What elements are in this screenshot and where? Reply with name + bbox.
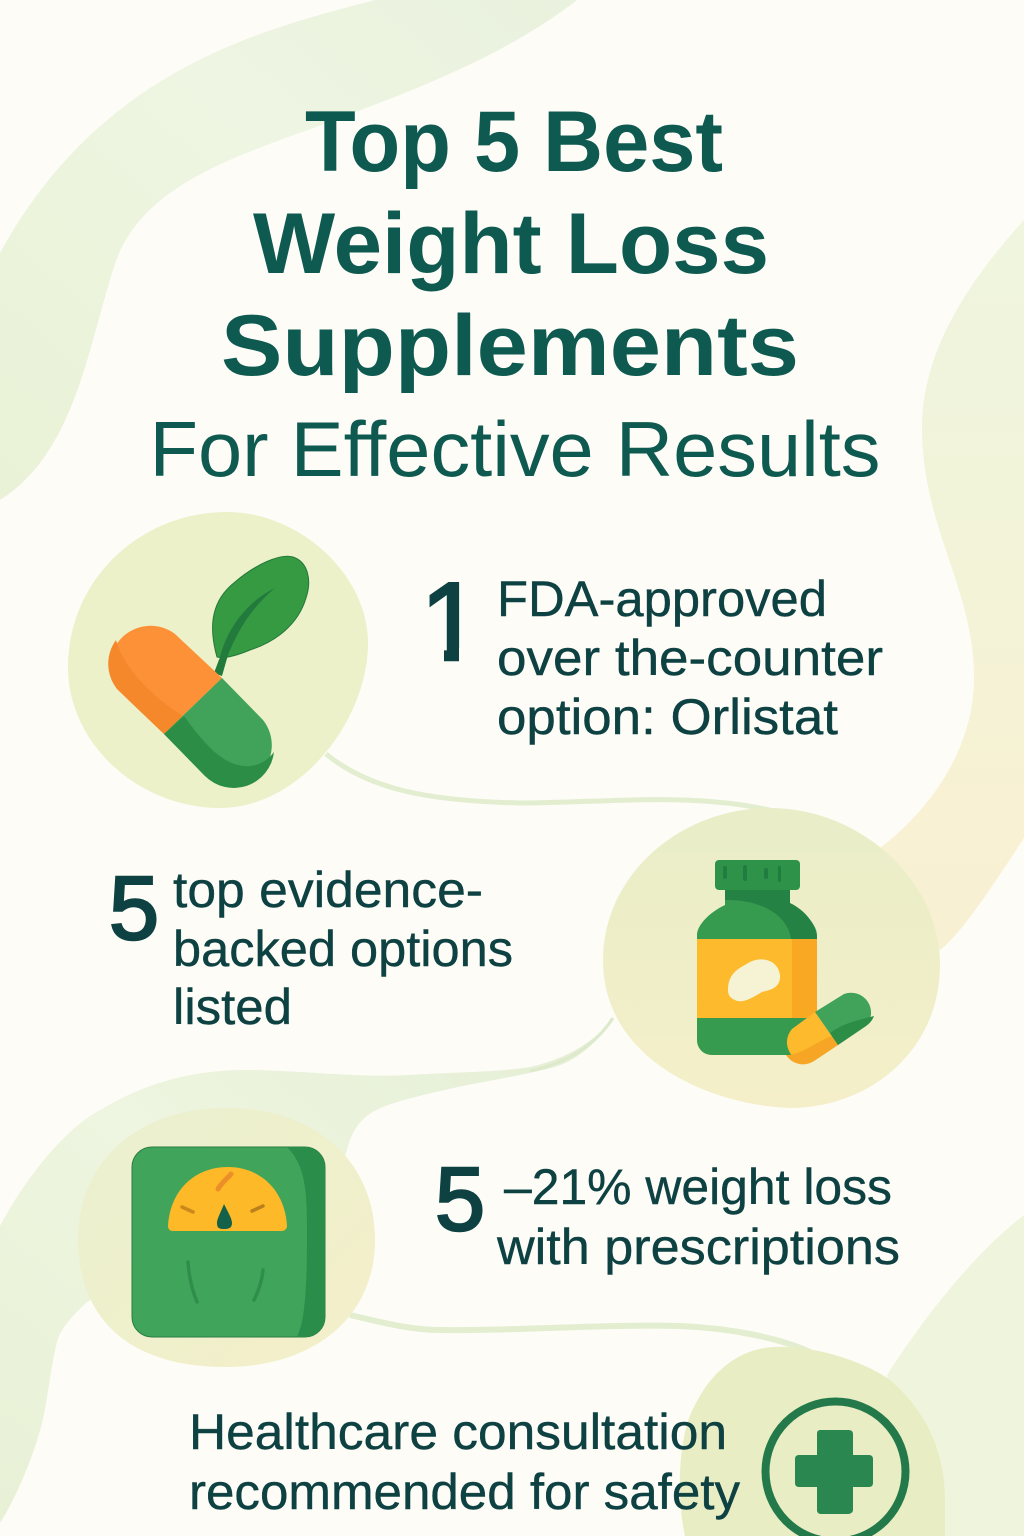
title: Weight Loss <box>253 196 769 292</box>
stat 2 text <box>173 862 513 1035</box>
background shape: right swoosh <box>880 220 1024 960</box>
stat 2 text: backed options <box>173 921 513 977</box>
stat 3 number: 5 <box>435 1150 485 1250</box>
stat 2 text: top evidence- <box>173 862 483 918</box>
connector: bottle to scale <box>530 1018 613 1071</box>
stat 3 text: –21% weight loss <box>504 1159 892 1215</box>
stat 1 text: over the-counter <box>497 630 883 686</box>
icon: supplement bottle <box>603 808 940 1108</box>
title: Supplements <box>221 298 799 394</box>
background shape: top-left swoosh <box>0 0 577 500</box>
subtitle: For Effective Results <box>150 405 880 493</box>
icon: medical cross <box>680 1347 945 1536</box>
icon: capsule and leaf <box>68 512 368 808</box>
background shape: bottom-right swoosh <box>887 1215 1024 1536</box>
stat 1 number: 1 <box>420 560 482 684</box>
stat 3 text: with prescriptions <box>496 1219 900 1275</box>
stat 2 number: 5 <box>109 859 159 959</box>
connector: scale to cross <box>350 1315 810 1352</box>
stat 4 text <box>189 1404 740 1520</box>
stat 4 text: Healthcare consultation <box>189 1404 727 1460</box>
connector: capsule to bottle <box>326 754 790 815</box>
stat 1 text <box>497 571 883 745</box>
stat 3 text <box>496 1159 900 1275</box>
icon: weighing scale <box>78 1108 375 1367</box>
stat 4 text: recommended for safety <box>189 1464 740 1520</box>
stat 1 text: option: Orlistat <box>497 689 838 745</box>
background shape: lower-left swoosh <box>0 1020 612 1523</box>
title: Top 5 Best <box>305 94 723 190</box>
stat 1 text: FDA-approved <box>497 571 827 627</box>
stat 2 text: listed <box>173 979 292 1035</box>
title <box>150 94 880 493</box>
